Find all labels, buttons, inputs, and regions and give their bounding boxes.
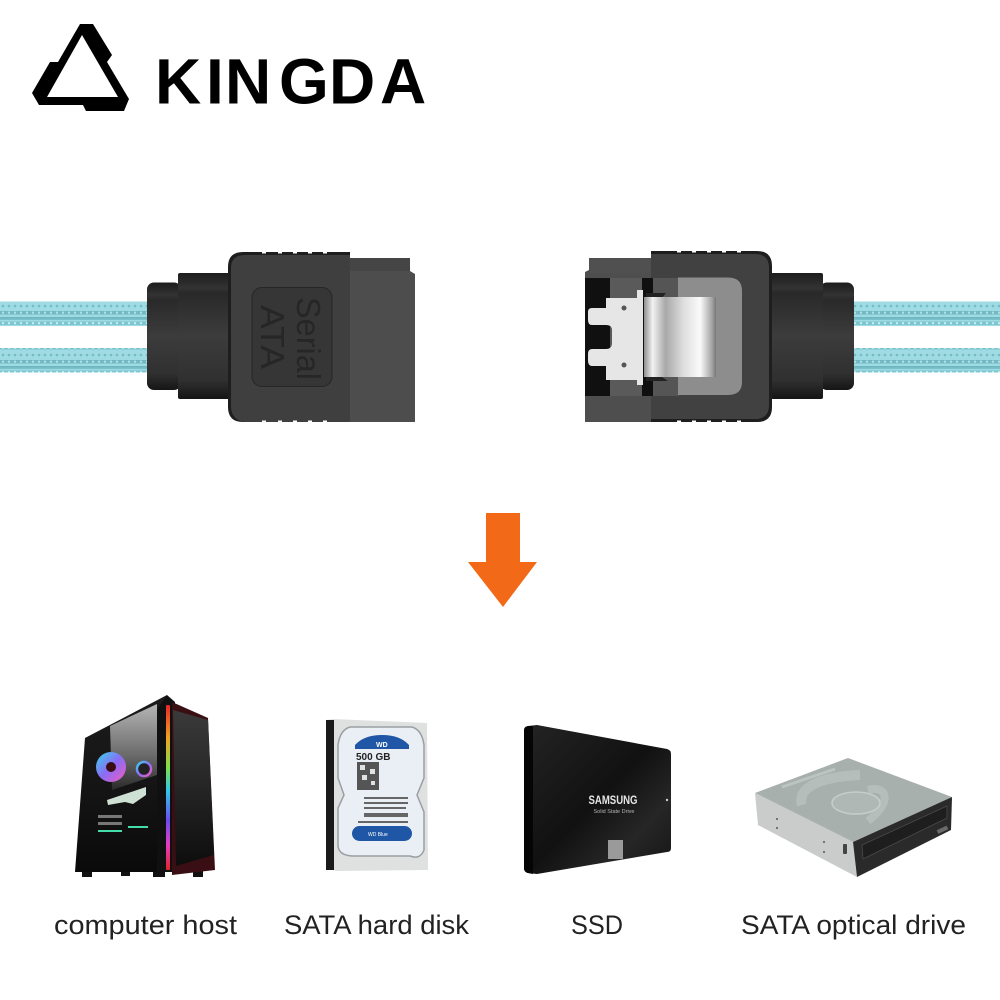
case feet <box>82 871 203 877</box>
eject button <box>937 826 948 834</box>
SSD body <box>524 725 671 874</box>
caption: SATA optical drive: SATA optical drive <box>741 910 966 940</box>
front bezel <box>853 797 952 877</box>
brand name: KINGDA <box>155 46 426 118</box>
embossed Serial ATA label: ATA <box>254 305 291 369</box>
graphics card <box>107 787 146 805</box>
top cover <box>755 758 952 842</box>
braided cable pair, left <box>0 302 148 372</box>
capacity text: 500 GB <box>356 752 390 763</box>
icon: triangle mark <box>32 24 129 111</box>
disc tray stamping <box>782 769 885 821</box>
device: SATA hard disk <box>326 719 428 871</box>
grip ridges, right <box>677 250 741 422</box>
brand text: SAMSUNG <box>588 795 638 807</box>
screw hole <box>666 799 668 801</box>
connector boot, left <box>147 273 230 399</box>
device: SATA optical drive <box>755 758 952 877</box>
WD Blue banner <box>352 826 412 841</box>
metal latch clip <box>588 290 716 385</box>
QR code <box>357 762 379 790</box>
drive chassis <box>326 719 428 871</box>
embossed Serial ATA label <box>252 288 332 386</box>
RGB fan, large <box>96 752 126 782</box>
left SATA cable and connector <box>0 252 415 422</box>
connector shell, left <box>228 252 415 422</box>
caption: computer host: computer host <box>54 910 238 940</box>
RGB fan, small <box>137 762 151 776</box>
arrow: down to devices <box>468 513 537 607</box>
front panel <box>172 702 215 875</box>
grip ridges, left <box>262 252 327 422</box>
drive top cover <box>338 727 424 857</box>
connector shell, right <box>585 250 772 422</box>
expansion slots <box>98 815 148 832</box>
WD Blue banner: WD Blue <box>368 832 388 838</box>
RGB light strip <box>166 705 170 870</box>
caption: SATA hard disk: SATA hard disk <box>284 910 469 940</box>
front frame <box>157 695 175 872</box>
spec lines <box>358 797 408 823</box>
logo: KINGDA <box>32 24 426 118</box>
embossed Serial ATA label: Serial <box>290 297 327 380</box>
braided cable pair, right <box>852 302 1000 372</box>
device: SSD <box>524 725 671 874</box>
latch cavity <box>585 278 742 396</box>
grey label patch <box>608 840 623 859</box>
mounting holes <box>776 818 847 854</box>
connector boot, right <box>771 273 854 399</box>
perforated panel highlight <box>110 704 157 790</box>
right SATA cable and connector <box>585 250 1000 422</box>
side wall <box>755 793 857 877</box>
SSD left edge <box>524 726 533 874</box>
glass side panel <box>75 695 167 872</box>
product text: Solid State Drive <box>594 809 634 815</box>
tray door <box>862 806 947 859</box>
blue label top <box>355 735 409 749</box>
caption: SSD: SSD <box>571 910 623 940</box>
WD badge: WD <box>376 742 388 749</box>
device: computer host <box>75 695 215 877</box>
